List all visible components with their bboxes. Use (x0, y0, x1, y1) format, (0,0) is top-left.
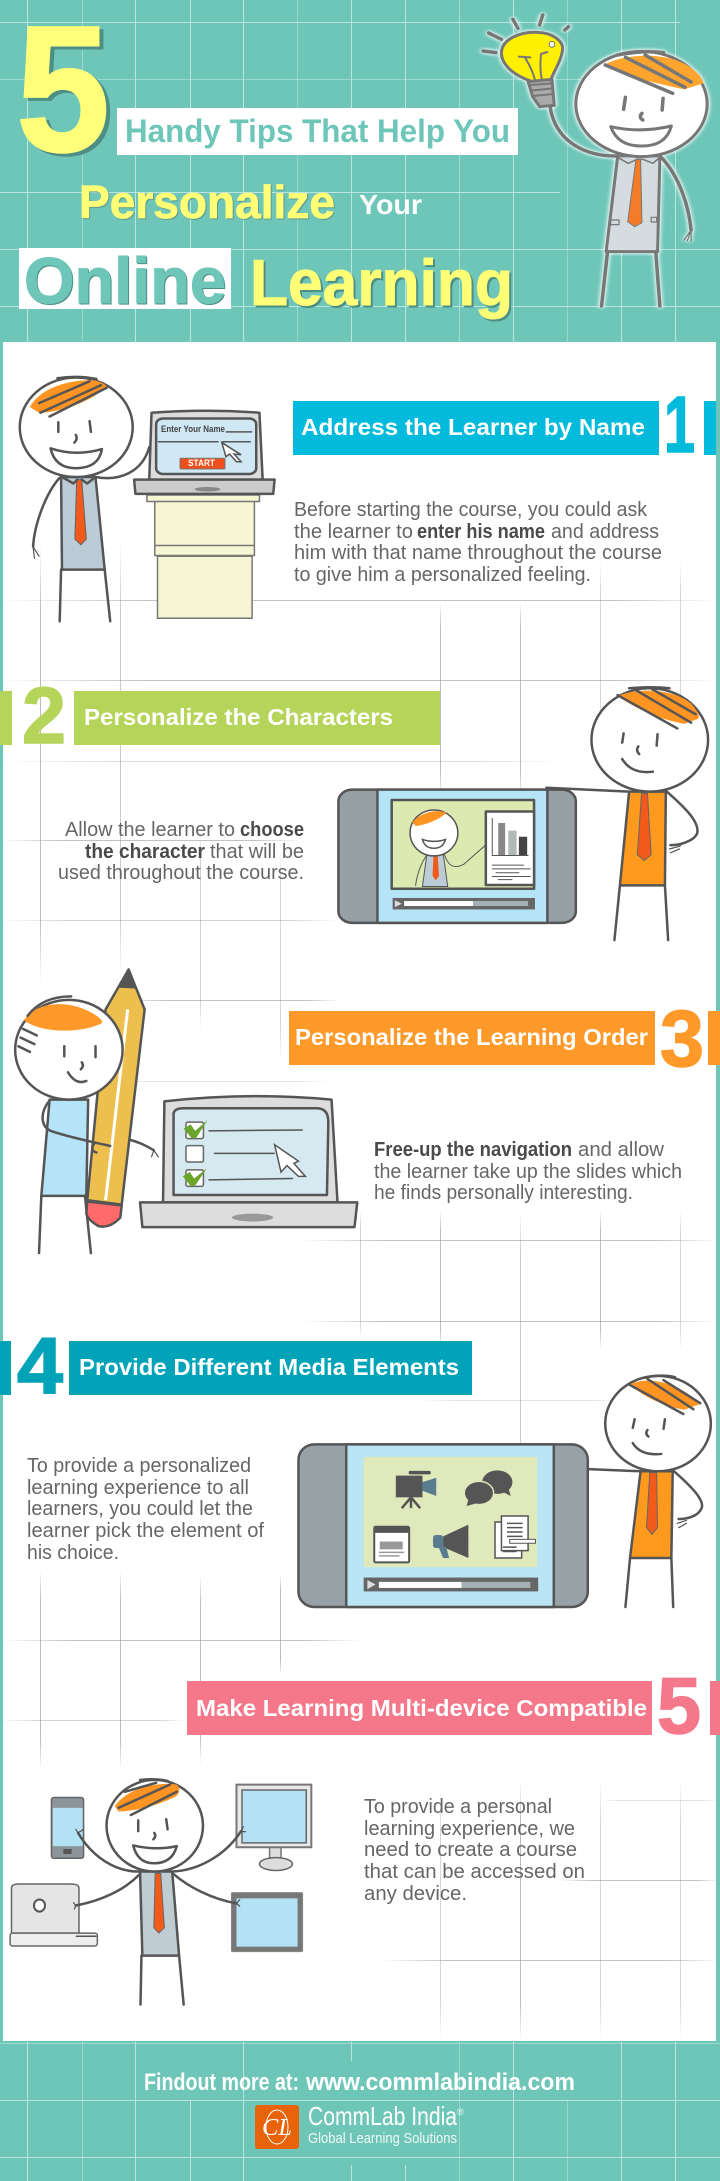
tip 2 text (58, 819, 304, 884)
tablet (298, 1444, 588, 1607)
title: Online box: Online (24, 244, 226, 317)
tip 1 text: him with that name throughout the course (294, 542, 662, 564)
tip 2 illustration: character with tablet (338, 687, 708, 940)
tip 1 text: Before starting the course, you could ask (294, 499, 648, 521)
tip 2 heading: Personalize the Characters (84, 704, 393, 730)
tip 3 heading: 3 (660, 994, 704, 1083)
icon: laptop (10, 1884, 97, 1946)
icon: chat bubbles (464, 1470, 512, 1506)
tip 4 illustration: character with media tablet (298, 1376, 711, 1607)
footer call to action: Findout more at: (144, 2069, 299, 2096)
tip 5 heading: Make Learning Multi-device Compatible (196, 1695, 647, 1721)
footer logo: Global Learning Solutions (308, 2130, 457, 2147)
tip 1 heading: Address the Learner by Name (301, 414, 645, 440)
icon: megaphone (433, 1525, 468, 1558)
tip 5 text: need to create a course (364, 1839, 577, 1861)
character arm holding bulb (550, 107, 618, 156)
icon: video camera (396, 1471, 436, 1508)
tip 3 text: the learner take up the slides which (374, 1161, 682, 1183)
icon: tablet (231, 1893, 303, 1952)
tip 4 text: To provide a personalized (27, 1455, 251, 1477)
character (20, 377, 149, 621)
tip 2 text: Allow the learner to (65, 819, 235, 841)
tip 1 text (294, 499, 662, 586)
tip 4 heading: 4 (17, 1321, 64, 1410)
tip 2 text: that will be (210, 841, 304, 863)
tip 2 text: the character (85, 841, 205, 863)
icon: phone (51, 1797, 84, 1858)
footer grid pattern (0, 2041, 720, 2181)
title: Personalize: Personalize (79, 176, 335, 228)
tip 3 text: Free-up the navigation (374, 1139, 572, 1161)
title: Learning: Learning (250, 246, 513, 319)
tip 5 illustration: character with four devices (10, 1779, 311, 2005)
tip 5 heading (187, 1661, 720, 1750)
icon: documents (495, 1516, 535, 1558)
tip 3 illustration: character with pencil and laptop (15, 969, 357, 1253)
tip 1 heading: 1 (664, 380, 695, 469)
laptop on boxes: Enter Your Name (161, 424, 225, 435)
tip 4 heading: Provide Different Media Elements (79, 1354, 459, 1380)
panel: white content area (3, 342, 716, 2041)
tip 4 heading (0, 1321, 472, 1410)
icon: light bulb (483, 15, 568, 107)
icon: monitor (236, 1785, 311, 1870)
character head (576, 51, 707, 157)
character and pencil (15, 969, 158, 1253)
tip 1 text: enter his name (417, 521, 545, 543)
tip 3 heading (289, 994, 720, 1083)
tip 4 text: his choice. (27, 1542, 119, 1564)
tip 2 heading (0, 671, 440, 760)
tip 5 heading: 5 (657, 1661, 701, 1750)
tip 3 text: he finds personally interesting. (374, 1182, 633, 1204)
icon: browser window (374, 1527, 409, 1562)
tip 4 text: learners, you could let the (27, 1498, 253, 1520)
title: Handy Tips box: Handy Tips That Help You (125, 113, 510, 149)
laptop with checklist (140, 1096, 357, 1227)
tip 5 text: To provide a personal (364, 1796, 552, 1818)
footer logo: CommLab India (308, 2101, 457, 2131)
footer logo: ® (457, 2107, 464, 2117)
laptop on boxes: START (188, 458, 215, 469)
tip 2 text: used throughout the course. (58, 862, 304, 884)
header grid pattern (0, 0, 720, 342)
tip 1 text: the learner to (294, 521, 413, 543)
tip 3 heading: Personalize the Learning Order (295, 1024, 648, 1050)
tip 3 text: and allow (578, 1139, 665, 1161)
title: Your: Your (359, 189, 422, 220)
tip 5 text (364, 1796, 585, 1905)
tip 5 text: any device. (364, 1883, 467, 1905)
tip 2 text: choose (240, 819, 304, 841)
tip 1 text: and address (551, 521, 659, 543)
logo mark (255, 2105, 299, 2149)
tip 3 text (374, 1139, 682, 1204)
laptop on boxes (134, 411, 275, 618)
character body (602, 157, 691, 306)
character (73, 1779, 246, 2005)
footer call to action (144, 2069, 575, 2096)
header character with light bulb (483, 15, 707, 306)
footer call to action: www.commlabindia.com (305, 2069, 575, 2096)
content grid pattern (0, 540, 720, 2041)
tip 1 text: to give him a personalized feeling. (294, 564, 591, 586)
character (546, 687, 708, 940)
footer logo (255, 2101, 464, 2149)
tip 4 text: learning experience to all (27, 1477, 249, 1499)
tip 1 heading (293, 380, 716, 469)
tip 1 illustration: character at laptop (20, 377, 275, 621)
tip 4 text: learner pick the element of (27, 1520, 264, 1542)
tip 4 text (27, 1455, 264, 1564)
tip 2 heading: 2 (22, 671, 66, 760)
tip 5 text: that can be accessed on (364, 1861, 585, 1883)
logo mark: CL (262, 2115, 292, 2141)
tablet (338, 790, 576, 923)
character (589, 1376, 711, 1607)
tip 5 text: learning experience, we (364, 1818, 575, 1840)
